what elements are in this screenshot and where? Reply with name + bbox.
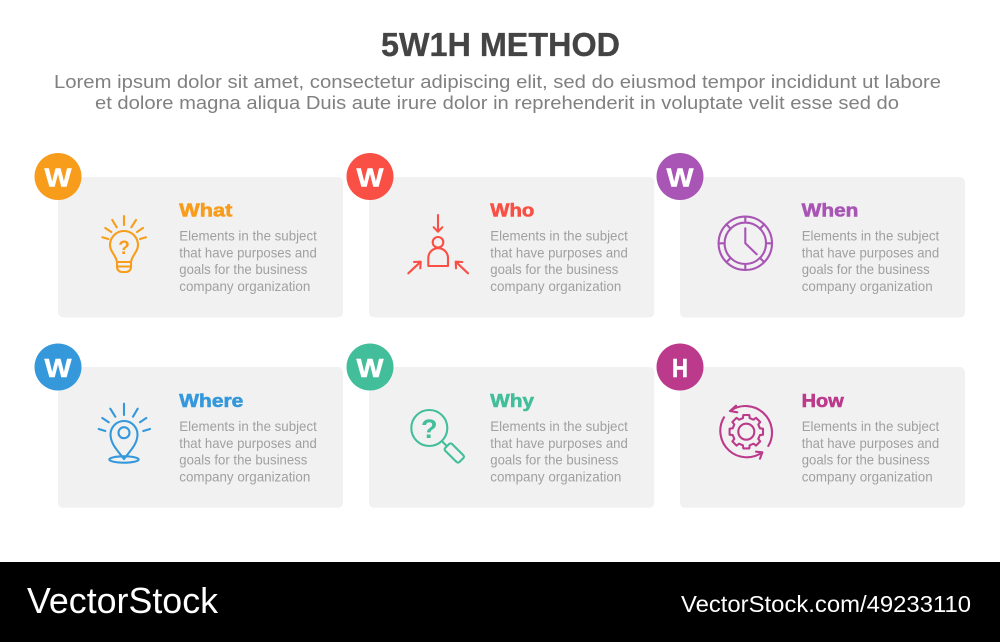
badge: who: W (356, 162, 384, 192)
description: where (179, 418, 317, 484)
badge: where (34, 344, 82, 390)
icon: light bulb with question mark (102, 216, 146, 272)
subtitle text: Lorem ipsum dolor sit amet, consectetur adipiscing elit, sed do eiusmod tempor incididunt ut labore (54, 71, 941, 92)
description: who: that have purposes and (490, 244, 628, 260)
description: what (179, 228, 317, 294)
badge: how: H (672, 353, 688, 383)
icon: gear with cycle arrows (720, 406, 772, 459)
badge: when: W (666, 162, 694, 192)
description: when: goals for the business (802, 261, 930, 277)
description: how: Elements in the subject (802, 418, 939, 434)
heading: when: When (802, 200, 858, 220)
description: where: goals for the business (179, 452, 307, 468)
subtitle text (54, 71, 941, 113)
description: where: Elements in the subject (179, 418, 317, 434)
badge: how (656, 344, 704, 390)
badge: where: W (44, 353, 72, 383)
description: why: that have purposes and (490, 435, 628, 451)
description: when: company organization (802, 278, 933, 294)
panel: when (656, 153, 965, 318)
heading: why: Why (490, 390, 535, 411)
description: why (490, 418, 628, 484)
heading: where: Where (179, 390, 243, 411)
heading: who: Who (490, 200, 534, 220)
icon: location pin (99, 404, 150, 463)
panel: how (656, 344, 965, 508)
description: how (802, 418, 939, 484)
badge: who (346, 153, 394, 200)
footer logo text: VectorStock (27, 580, 219, 621)
footer bar (0, 562, 1000, 642)
heading: how: How (802, 390, 844, 411)
description: why: Elements in the subject (490, 418, 628, 434)
badge: why (346, 344, 394, 390)
description: when (802, 228, 939, 294)
description: where: that have purposes and (179, 435, 317, 451)
description: what: Elements in the subject (179, 228, 317, 244)
description: how: that have purposes and (802, 435, 939, 451)
description: when: Elements in the subject (802, 228, 939, 244)
icon: magnifier with question mark: ? (421, 414, 438, 444)
icon: light bulb with question mark: ? (118, 238, 130, 259)
panel: who (346, 153, 654, 318)
heading: what: What (179, 200, 232, 220)
panel: what (34, 153, 343, 318)
footer image id: VectorStock.com/49233110 (681, 591, 971, 617)
icon: clock (719, 217, 772, 270)
description: who: company organization (490, 278, 621, 294)
description: why: goals for the business (490, 452, 618, 468)
description: where: company organization (179, 468, 310, 484)
badge: what: W (44, 162, 72, 192)
description: what: that have purposes and (179, 244, 317, 260)
description: why: company organization (490, 468, 621, 484)
description: who (490, 228, 628, 294)
subtitle text: et dolore magna aliqua Duis aute irure dolor in reprehenderit in voluptate velit esse sed do (95, 92, 899, 113)
badge: why: W (356, 353, 384, 383)
panel: where (34, 344, 343, 508)
badge: what (34, 153, 82, 200)
description: who: Elements in the subject (490, 228, 628, 244)
description: when: that have purposes and (802, 244, 939, 260)
description: what: company organization (179, 278, 310, 294)
badge: when (656, 153, 704, 200)
description: what: goals for the business (179, 261, 307, 277)
icon: person with arrows (408, 215, 468, 273)
description: who: goals for the business (490, 261, 618, 277)
description: how: company organization (802, 468, 933, 484)
panel: why (346, 344, 654, 508)
icon: magnifier with question mark (411, 410, 465, 463)
title: 5W1H METHOD (381, 26, 620, 63)
description: how: goals for the business (802, 452, 930, 468)
